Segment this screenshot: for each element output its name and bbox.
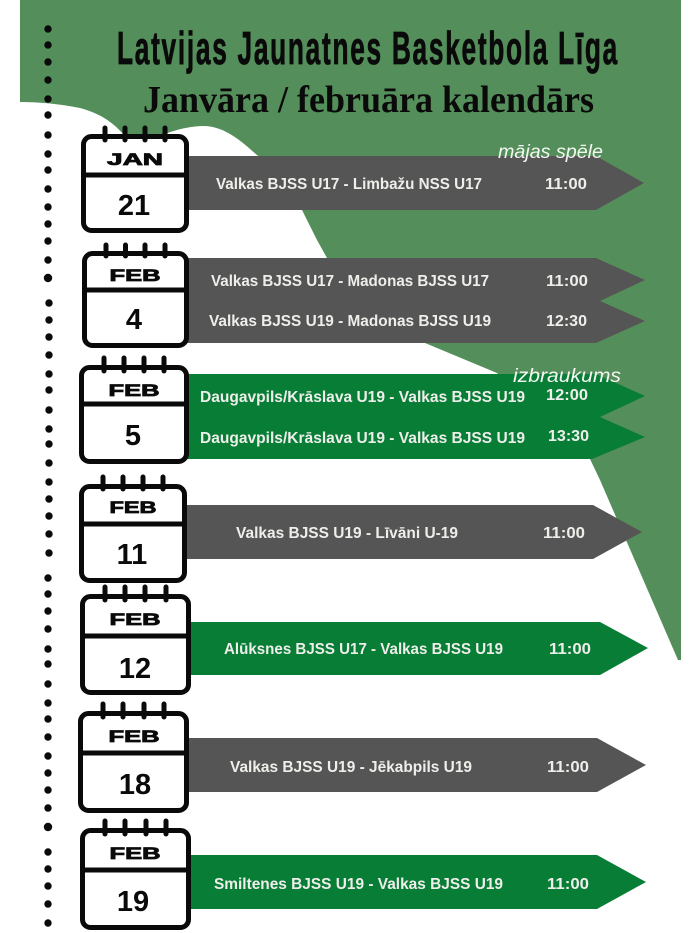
match arrow: Feb 4 (185, 258, 645, 343)
calendar icon: Feb 4 (84, 245, 186, 346)
calendar icon: Jan 21 (84, 128, 186, 230)
calendar icon: Feb 19: FEB (110, 845, 161, 863)
calendar icon: Feb 11 (82, 477, 184, 580)
match arrow: Feb 18: 11:00 (547, 759, 589, 776)
calendar icon: Feb 4: 4 (126, 304, 142, 336)
calendar icon: Feb 11: 11 (117, 539, 147, 571)
match arrow: Feb 4: Valkas BJSS U17 - Madonas BJSS U17 (211, 273, 489, 290)
match arrow: Feb 5: Daugavpils/Krāslava U19 - Valkas BJSS U19 (200, 430, 525, 447)
match arrow: Jan 21: 11:00 (545, 176, 587, 193)
match arrow: Feb 4: 11:00 (546, 273, 588, 290)
match arrow: Jan 21: Valkas BJSS U17 - Limbažu NSS U17 (216, 176, 482, 193)
calendar icon: Jan 21: JAN (107, 151, 163, 169)
match arrow: Jan 21 (185, 156, 644, 210)
match arrow: Feb 5: 13:30 (548, 428, 589, 445)
match arrow: Feb 12: Alūksnes BJSS U17 - Valkas BJSS U19 (224, 641, 503, 658)
calendar icon: Feb 12: FEB (110, 611, 161, 629)
match arrow: Feb 19: Smiltenes BJSS U19 - Valkas BJSS U19 (214, 876, 503, 893)
match arrow: Feb 4: Valkas BJSS U19 - Madonas BJSS U19 (209, 313, 491, 330)
match arrow: Feb 18 (185, 738, 646, 792)
match arrow: Feb 11 (183, 505, 642, 559)
calendar icon: Feb 11: FEB (110, 499, 157, 517)
calendar icon: Feb 19: 19 (117, 886, 149, 918)
match arrow: Feb 11: 11:00 (543, 525, 585, 542)
subtitle: Janvāra / februāra kalendārs (143, 79, 594, 121)
calendar icon: Feb 12: 12 (119, 653, 151, 685)
legend: home game: mājas spēle (498, 141, 603, 163)
calendar icon: Feb 19 (82, 821, 188, 928)
calendar icon: Feb 18: FEB (108, 728, 160, 746)
calendar icon: Feb 18 (80, 704, 186, 810)
green background shape (20, 0, 681, 660)
calendar icon: Jan 21: 21 (118, 190, 150, 222)
match arrow: Feb 19: 11:00 (547, 876, 589, 893)
match arrow: Feb 12 (187, 622, 648, 675)
match arrow: Feb 5: 12:00 (546, 387, 588, 404)
calendar icon: Feb 18: 18 (119, 769, 151, 801)
match arrow: Feb 18: Valkas BJSS U19 - Jēkabpils U19 (230, 759, 472, 776)
calendar icon: Feb 5: 5 (125, 420, 141, 452)
match arrow: Feb 5 (185, 374, 645, 459)
match arrow: Feb 11: Valkas BJSS U19 - Līvāni U-19 (236, 525, 458, 542)
legend: away game: izbraukums (513, 365, 621, 387)
calendar icon: Feb 5 (82, 358, 186, 462)
match arrow: Feb 4: 12:30 (546, 313, 587, 330)
dotted timeline (44, 25, 53, 927)
calendar icon: Feb 5: FEB (108, 382, 160, 400)
match arrow: Feb 12: 11:00 (549, 641, 591, 658)
calendar icon: Feb 4: FEB (110, 267, 161, 285)
calendar icon: Feb 12 (82, 587, 188, 692)
match arrow: Feb 5: Daugavpils/Krāslava U19 - Valkas BJSS U19 (200, 389, 525, 406)
match arrow: Feb 19 (187, 855, 646, 909)
